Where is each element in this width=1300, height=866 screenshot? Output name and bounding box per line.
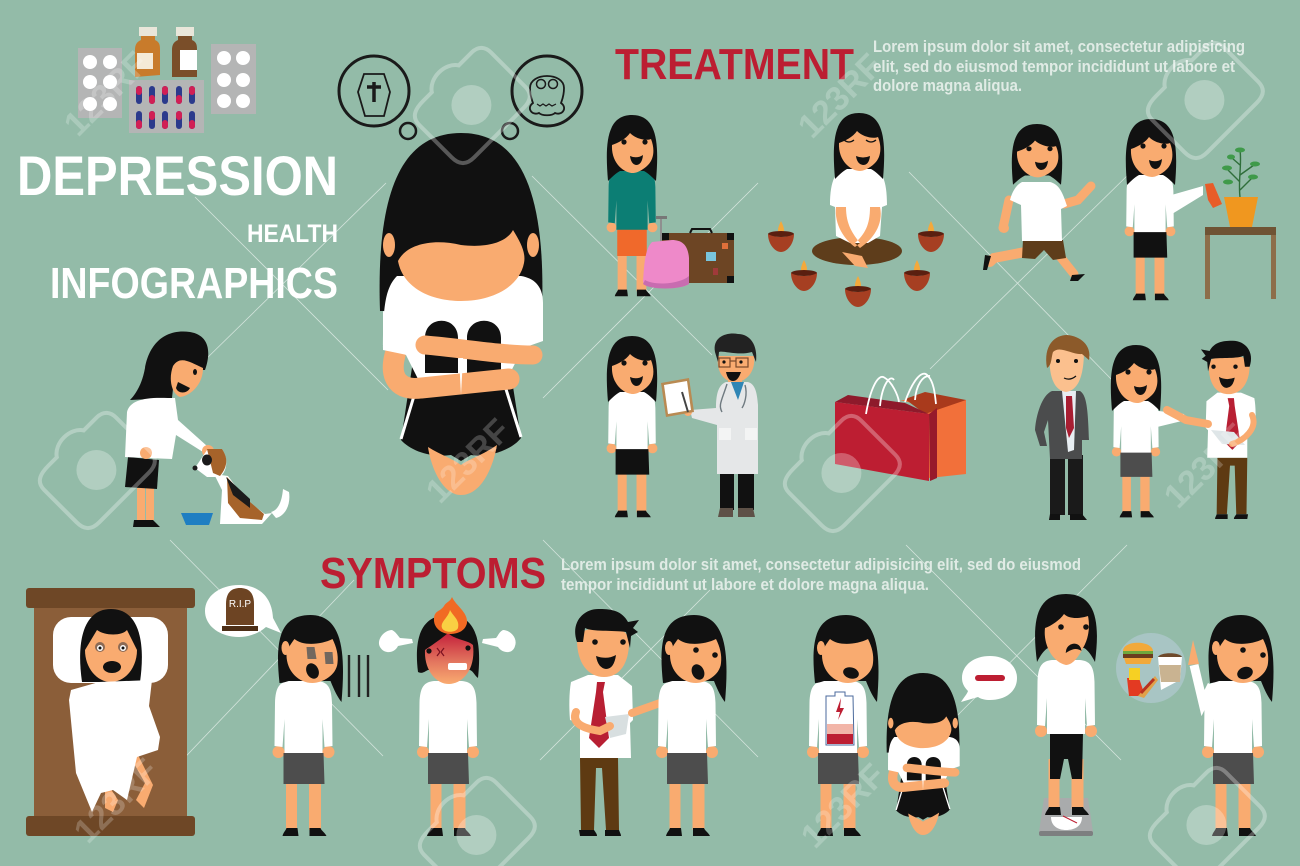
icon: steam puffs bbox=[379, 630, 516, 652]
text: 123RF bbox=[419, 412, 518, 511]
text block: treatment description: dolore magna aliqua. bbox=[873, 76, 1022, 95]
title bbox=[17, 144, 338, 308]
callout: RIP speech bubble: R.I.P bbox=[229, 599, 251, 610]
figure: doctor bbox=[684, 334, 758, 517]
text block: treatment description: Lorem ipsum dolor sit amet, consectetur adipisicing bbox=[873, 37, 1245, 56]
figure: woman with luggage (travel) bbox=[607, 115, 734, 296]
text block: symptoms description: Lorem ipsum dolor sit amet, consectetur adipisicing elit, sed do eiusmod bbox=[561, 555, 1081, 574]
figure: sitting woman crying bbox=[887, 673, 960, 835]
icon: side table bbox=[1205, 227, 1276, 299]
icon: junk food circle bbox=[1116, 633, 1186, 703]
figure: woman watering a plant bbox=[1125, 119, 1276, 300]
icon: depressed lines bbox=[349, 655, 368, 697]
icon: suitcases bbox=[643, 216, 734, 288]
figure: woman running bbox=[983, 124, 1091, 281]
icon: coffee cup bbox=[605, 714, 629, 738]
figure: woman refusing food bbox=[1188, 615, 1274, 836]
text block: symptoms description: tempor incididunt ut labore et dolore magna aliqua. bbox=[561, 575, 929, 594]
icon: flame bbox=[434, 597, 467, 634]
title: DEPRESSION bbox=[17, 144, 338, 207]
figure: woman petting a dog bbox=[125, 332, 289, 527]
icon: oil lamps bbox=[768, 221, 944, 307]
figure: woman with doctor bbox=[607, 334, 758, 517]
icon: water bowl bbox=[181, 513, 213, 525]
text: 123RF bbox=[57, 45, 156, 144]
figure: woman talking bbox=[1111, 345, 1186, 517]
icon: dog bbox=[192, 449, 289, 524]
figure: woman with low battery bbox=[807, 615, 879, 836]
text block: treatment description bbox=[873, 37, 1245, 95]
figure: woman exhausted bbox=[272, 615, 343, 836]
icon: spray bottle bbox=[1205, 183, 1222, 208]
icon: bathroom scale bbox=[1039, 798, 1093, 836]
text block: treatment description: elit, sed do eiusmod tempor incididunt ut labore et bbox=[873, 57, 1235, 76]
text: 123RF bbox=[791, 47, 890, 146]
icon: battery bbox=[826, 692, 854, 745]
figure: man with coffee bbox=[569, 609, 660, 836]
figure: woman on scale bbox=[1035, 594, 1097, 836]
title: HEALTH bbox=[247, 220, 338, 248]
figure: woman lying in bed bbox=[26, 588, 195, 836]
icon: potted plant bbox=[1222, 148, 1260, 227]
icon: clipboard bbox=[661, 378, 694, 417]
figure: woman meditating with candles bbox=[768, 113, 944, 307]
icon: shopping bags bbox=[835, 374, 966, 481]
icon: thought bubbles coffin and skull bbox=[339, 56, 582, 139]
figure: man explaining with paper bbox=[1167, 341, 1256, 519]
heading: treatment: TREATMENT bbox=[615, 40, 854, 89]
heading: symptoms: SYMPTOMS bbox=[320, 549, 546, 598]
figure: sad woman hugging knees bbox=[380, 133, 543, 495]
figure: angry woman with fire bbox=[379, 597, 516, 836]
title: INFOGRAPHICS bbox=[50, 259, 338, 308]
callout: minus speech bubble bbox=[961, 656, 1017, 702]
callout: RIP speech bubble bbox=[205, 585, 281, 637]
text: 123RF bbox=[794, 757, 893, 856]
figure: woman talking to man bbox=[656, 615, 727, 836]
text block: symptoms description bbox=[561, 555, 1081, 594]
text: 123RF bbox=[1157, 417, 1256, 516]
figure: businessman in suit bbox=[1035, 335, 1089, 520]
icon: medicine pills and bottles bbox=[78, 27, 256, 133]
text: 123RF bbox=[67, 752, 166, 851]
